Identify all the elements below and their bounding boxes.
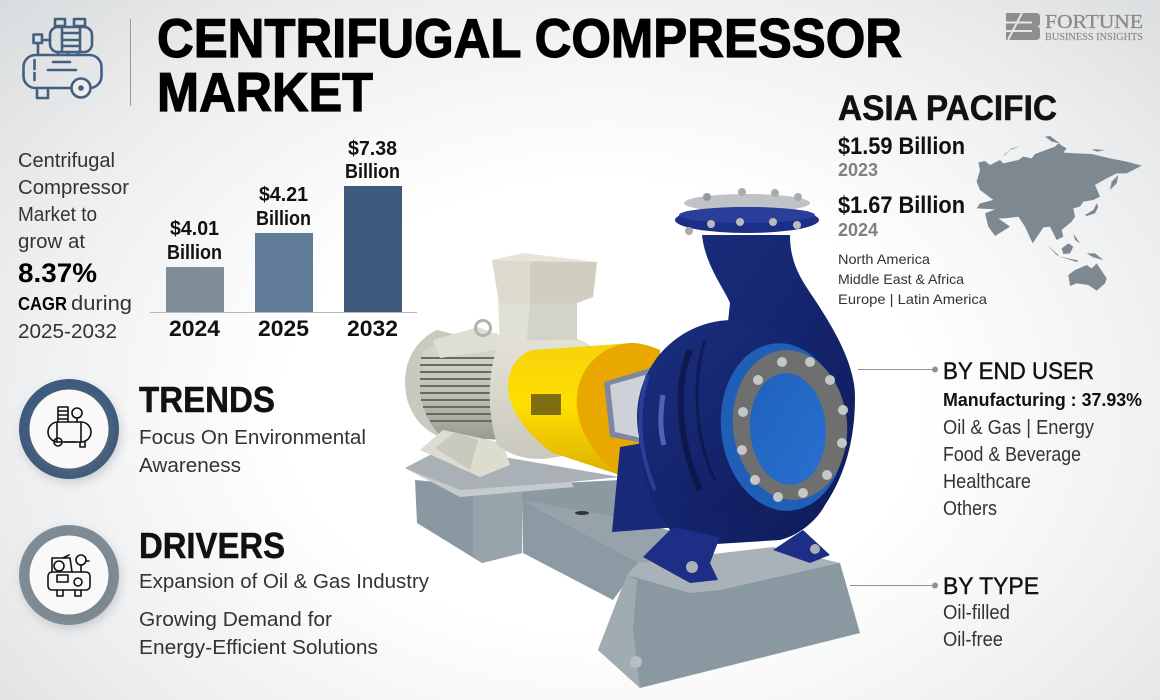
text: trends detail	[139, 427, 366, 477]
text block: market growth statement	[18, 150, 132, 343]
panel: Asia Pacific	[838, 89, 1142, 307]
text: trends detail: Awareness	[139, 455, 241, 477]
base: long beam	[522, 500, 690, 600]
text block: market growth statement: Centrifugal	[18, 150, 115, 172]
coupling guard: yellow	[508, 343, 660, 478]
text: other regions: North America	[838, 251, 930, 267]
volute casing: blue	[637, 235, 855, 545]
bar: 2025: 2025	[258, 316, 309, 341]
panel: by end user	[943, 358, 1142, 520]
bar: 2024	[166, 218, 224, 341]
stat: 2024 value: 2024	[838, 220, 878, 240]
text: drivers detail	[139, 571, 429, 659]
text: other regions: Europe | Latin America	[838, 291, 987, 307]
flange: discharge	[675, 188, 819, 235]
text block: market growth statement: Market to	[18, 204, 97, 226]
divider: header	[130, 19, 131, 106]
motor: ribbed body	[405, 320, 590, 477]
panel: by type: Oil-filled	[943, 602, 1010, 624]
heading: drivers: DRIVERS	[139, 525, 285, 566]
bar chart: market size	[150, 138, 417, 341]
title: CENTRIFUGAL COMPRESSOR	[157, 7, 902, 69]
flange: suction with blue cover	[713, 337, 855, 517]
panel: by end user: Oil & Gas | Energy	[943, 417, 1094, 439]
panel: by end user: Others	[943, 498, 997, 520]
text block: market growth statement: during	[71, 293, 132, 315]
stat: 2023 value: 2023	[838, 160, 878, 180]
map: Asia Pacific	[977, 136, 1142, 291]
text: other regions	[838, 251, 987, 307]
bearing housing	[604, 368, 680, 532]
logo: Fortune Business Insights: BUSINESS INSIGHTS	[1045, 32, 1143, 43]
bar: 2024: Billion	[167, 242, 222, 264]
bar: 2025: $4.21	[259, 184, 308, 206]
stat: 2023 value	[838, 133, 965, 180]
panel: by type	[943, 573, 1039, 651]
heading: trends: TRENDS	[139, 379, 275, 420]
bar: 2032	[344, 138, 402, 341]
title	[157, 7, 902, 123]
text block: market growth statement: Compressor	[18, 177, 129, 199]
text block: market growth statement: 8.37%	[18, 258, 97, 288]
bar: 2032: $7.38	[348, 138, 397, 160]
icon: drivers badge	[19, 525, 121, 629]
text: trends detail: Focus On Environmental	[139, 427, 366, 449]
illustration: centrifugal pump	[405, 188, 860, 688]
title: MARKET	[157, 61, 373, 123]
bar: 2024: $4.01	[170, 218, 219, 240]
stat: 2024 value: $1.67 Billion	[838, 192, 965, 219]
motor: terminal box	[492, 253, 597, 345]
bar: 2025	[255, 184, 313, 341]
leader line: by type	[850, 582, 938, 588]
bar: 2024: 2024	[169, 316, 221, 341]
leader line: by end user	[858, 366, 938, 372]
bar: 2032: Billion	[345, 161, 400, 183]
bar: 2025: Billion	[256, 208, 311, 230]
panel: by end user: Manufacturing : 37.93%	[943, 390, 1142, 410]
stat: 2024 value	[838, 192, 965, 240]
icon: trends badge	[19, 379, 121, 483]
panel: by end user: BY END USER	[943, 358, 1094, 385]
panel: drivers	[19, 525, 429, 659]
panel: by type: Oil-free	[943, 629, 1003, 651]
stat: 2023 value: $1.59 Billion	[838, 133, 965, 160]
panel: trends	[19, 379, 366, 483]
bar: 2032: 2032	[347, 316, 398, 341]
panel: by end user: Food & Beverage	[943, 444, 1081, 466]
icon: compressor header icon	[24, 19, 102, 98]
base: front foot	[598, 527, 860, 688]
text: drivers detail: Growing Demand for	[139, 609, 332, 631]
panel: by type: BY TYPE	[943, 573, 1039, 600]
logo: Fortune Business Insights: FORTUNE	[1045, 11, 1143, 33]
text block: market growth statement: grow at	[18, 231, 85, 253]
text block: market growth statement: 2025-2032	[18, 321, 117, 343]
logo: Fortune Business Insights	[1006, 11, 1143, 43]
text: drivers detail: Expansion of Oil & Gas Industry	[139, 571, 429, 593]
panel: by end user: Healthcare	[943, 471, 1031, 493]
text: other regions: Middle East & Africa	[838, 271, 964, 287]
base: rear block	[405, 447, 620, 563]
heading: Asia Pacific: ASIA PACIFIC	[838, 89, 1057, 128]
text block: market growth statement: CAGR	[18, 294, 67, 314]
text: drivers detail: Energy-Efficient Solutions	[139, 637, 378, 659]
